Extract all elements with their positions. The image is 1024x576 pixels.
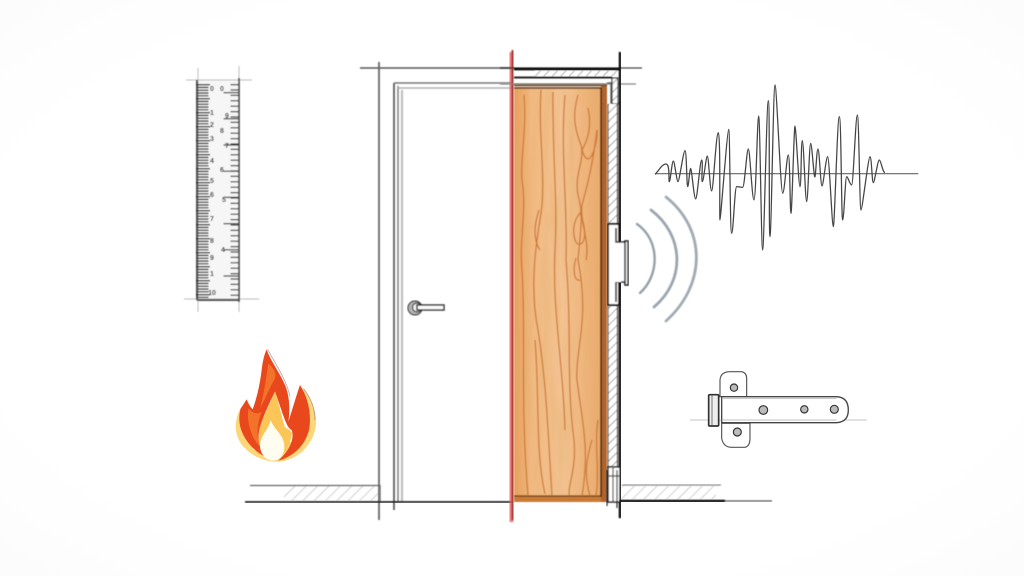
ruler numerals: 6 xyxy=(210,192,214,199)
ruler numerals: 6 xyxy=(220,167,224,174)
ruler numerals: 9 xyxy=(210,255,214,262)
ruler numerals: 9 xyxy=(225,113,229,120)
ruler numerals: 5 xyxy=(222,197,226,204)
red cut line xyxy=(510,50,514,522)
wall section with hatching xyxy=(608,52,620,518)
ruler numerals: 5 xyxy=(210,178,214,185)
left floor with hatching xyxy=(245,485,512,502)
ruler numerals: 4 xyxy=(221,247,225,254)
ruler numerals: 4 xyxy=(210,158,214,165)
ruler numerals: 0 xyxy=(220,86,224,93)
ruler numerals: 0 xyxy=(210,86,214,93)
ruler numerals: 10 xyxy=(208,290,216,297)
wood door section xyxy=(514,84,607,502)
right floor with hatching xyxy=(620,485,772,501)
ruler numerals: 8 xyxy=(210,238,214,245)
icon: door handle xyxy=(408,301,444,315)
ruler numerals: 7 xyxy=(225,143,229,150)
chart: sound waveform xyxy=(655,85,918,250)
seal hardware on frame xyxy=(608,224,628,305)
ruler numerals: 7 xyxy=(210,216,214,223)
ruler numerals: 1 xyxy=(210,110,214,117)
top frame section with hatching xyxy=(500,68,642,104)
ruler numerals xyxy=(208,86,229,297)
ruler numerals: 1 xyxy=(210,271,214,278)
ruler numerals: 8 xyxy=(220,128,224,135)
ruler numerals: 3 xyxy=(210,136,214,143)
icon: sound arcs xyxy=(637,197,696,321)
threshold detail at bottom xyxy=(607,467,620,518)
ruler numerals: 2 xyxy=(210,122,214,129)
icon: hinge xyxy=(690,372,867,447)
icon: flame xyxy=(236,349,316,462)
icon: ruler xyxy=(184,66,259,312)
left door frame and door leaf outline xyxy=(360,62,514,520)
wood grain xyxy=(521,90,598,496)
